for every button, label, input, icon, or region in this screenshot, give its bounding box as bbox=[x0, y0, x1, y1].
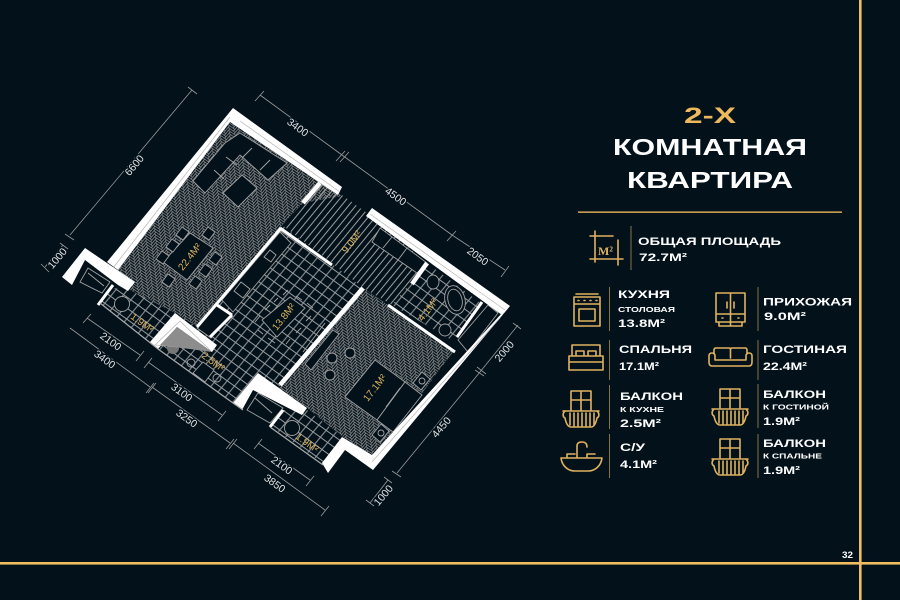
dim 4500 bbox=[340, 152, 456, 241]
item: bathroom: С/У bbox=[620, 442, 645, 454]
toilet bbox=[427, 275, 439, 289]
dim 3850 bbox=[229, 439, 329, 516]
item: bedroom balcony: БАЛКОН bbox=[763, 438, 826, 450]
room labels: 17.1М² bbox=[361, 372, 390, 404]
item: kitchen balcony: БАЛКОН bbox=[620, 391, 683, 403]
balcony table bbox=[193, 362, 214, 382]
item: kitchen: КУХНЯ bbox=[618, 289, 670, 301]
wall shading bbox=[113, 117, 505, 462]
room labels: 13.8М² bbox=[270, 301, 299, 333]
icon: sink bbox=[561, 442, 602, 471]
dim 2100 a: 2100 bbox=[97, 330, 124, 354]
outer wall: top and left bbox=[107, 108, 342, 270]
dim 1000 top: 1000 bbox=[46, 246, 70, 271]
title bbox=[613, 103, 807, 193]
item: bathroom bbox=[561, 434, 657, 478]
interior walls bbox=[98, 228, 482, 427]
icon: balcony bbox=[712, 439, 748, 475]
room labels: 2.5М² bbox=[199, 350, 227, 375]
icon: stove bbox=[574, 294, 600, 326]
wall block right bbox=[233, 373, 307, 415]
room labels bbox=[128, 228, 441, 456]
item: kitchen balcony bbox=[563, 385, 683, 430]
title: КВАРТИРА bbox=[627, 167, 793, 193]
wardrobe strip bbox=[303, 323, 339, 370]
hall wardrobe bbox=[372, 228, 427, 273]
icon: area bbox=[590, 231, 623, 265]
item: kitchen: СТОЛОВАЯ bbox=[618, 305, 675, 314]
dim 4500: 4500 bbox=[382, 185, 409, 209]
total area: ОБЩАЯ ПЛОЩАДЬ bbox=[638, 236, 781, 248]
title: 2-Х bbox=[684, 103, 736, 128]
wall block left bbox=[62, 248, 135, 291]
floor: living room bbox=[116, 120, 342, 327]
bathtub bbox=[442, 283, 468, 317]
shaft bbox=[458, 305, 498, 352]
icon: sofa bbox=[709, 348, 752, 366]
total area: 72.7М² bbox=[639, 252, 687, 264]
dim 2000 bbox=[475, 323, 521, 376]
floor: bedroom bbox=[278, 287, 453, 458]
title: КОМНАТНАЯ bbox=[613, 134, 807, 160]
dim 3400 low bbox=[70, 328, 154, 393]
item: living balcony: К ГОСТИНОЙ bbox=[763, 402, 829, 412]
dim 4450 bbox=[392, 367, 486, 477]
floor: bedroom balcony bbox=[272, 410, 343, 463]
dim 3100: 3100 bbox=[168, 381, 195, 405]
item: living room: 22.4М² bbox=[763, 361, 807, 373]
page number: 32 bbox=[842, 550, 853, 561]
dim 1000 bottom: 1000 bbox=[372, 483, 396, 508]
room labels: 1.9М² bbox=[293, 431, 321, 456]
item: living room bbox=[709, 340, 847, 380]
item: bedroom: СПАЛЬНЯ bbox=[619, 344, 692, 356]
dim 3250: 3250 bbox=[173, 407, 200, 431]
dim 1000 bottom bbox=[366, 477, 396, 508]
corner sofa bbox=[193, 133, 287, 193]
dim 3400 top bbox=[255, 91, 345, 161]
item: living room: ГОСТИНАЯ bbox=[763, 344, 847, 356]
item: bathroom: 4.1М² bbox=[620, 459, 657, 471]
floor: bathroom bbox=[392, 263, 482, 342]
wall block middle bbox=[150, 313, 217, 352]
item: hall: ПРИХОЖАЯ bbox=[763, 296, 852, 308]
floor: living balcony bbox=[100, 288, 175, 342]
icon: balcony bbox=[712, 389, 748, 425]
item: bedroom: 17.1М² bbox=[619, 361, 659, 373]
dim 3850: 3850 bbox=[261, 472, 288, 496]
dim 2100 b: 2100 bbox=[268, 454, 295, 478]
nightstands bbox=[372, 372, 430, 442]
bed bbox=[345, 360, 422, 432]
plant bbox=[167, 342, 179, 354]
item: kitchen balcony: 2.5М² bbox=[620, 418, 661, 430]
dim 2100 a bbox=[83, 314, 144, 361]
sink bbox=[439, 324, 451, 336]
bedroom furniture bbox=[303, 323, 430, 442]
dim 2100 b bbox=[254, 439, 314, 486]
room labels: 1.9М² bbox=[128, 311, 156, 336]
kitchen dining table bbox=[255, 290, 313, 344]
outer wall: right bbox=[322, 306, 510, 473]
item: kitchen: 13.8М² bbox=[618, 318, 665, 330]
item: hall: 9.0М² bbox=[764, 311, 806, 323]
floor: hall bbox=[282, 183, 427, 305]
item: living balcony: 1.9М² bbox=[763, 416, 800, 428]
title rule bbox=[578, 211, 842, 213]
living room furniture bbox=[156, 133, 287, 289]
chairs bbox=[325, 348, 355, 380]
room labels: 22.4М² bbox=[176, 241, 205, 273]
bathroom fixtures bbox=[427, 275, 498, 352]
kitchen furniture bbox=[222, 232, 313, 344]
item: living balcony: БАЛКОН bbox=[763, 389, 826, 401]
icon: balcony bbox=[563, 391, 599, 427]
door boxes bbox=[80, 268, 283, 423]
dim 3400 low: 3400 bbox=[91, 348, 118, 372]
item: bedroom bbox=[569, 340, 692, 380]
balcony furniture bbox=[114, 296, 300, 436]
dimension lines bbox=[41, 87, 521, 516]
dim 2050 bbox=[452, 235, 509, 277]
item: bedroom balcony: 1.9М² bbox=[763, 465, 800, 477]
dim 3250 bbox=[148, 383, 234, 449]
item: hall bbox=[716, 287, 852, 331]
item: living balcony bbox=[712, 384, 829, 428]
item: kitchen balcony: К КУХНЕ bbox=[620, 405, 664, 414]
floor plan bbox=[41, 87, 521, 516]
item: bedroom balcony bbox=[712, 434, 826, 478]
dim 3100 bbox=[144, 358, 226, 421]
dim 3400 top: 3400 bbox=[284, 116, 311, 140]
dining table bbox=[156, 227, 222, 289]
floor: kitchen bbox=[158, 225, 362, 403]
icon: wardrobe bbox=[716, 293, 745, 326]
coffee table bbox=[223, 175, 257, 207]
dim 2000: 2000 bbox=[493, 339, 517, 364]
balcony edge lines bbox=[100, 303, 323, 465]
item: kitchen bbox=[574, 287, 675, 331]
dim 6600: 6600 bbox=[123, 153, 147, 178]
outer wall: right top bbox=[366, 208, 510, 315]
dim 2050: 2050 bbox=[464, 245, 491, 269]
room labels: 9.0М² bbox=[340, 228, 365, 256]
icon: area: М² bbox=[598, 244, 613, 258]
item: bedroom balcony: К СПАЛЬНЕ bbox=[763, 452, 822, 460]
room labels: 4.1М² bbox=[416, 296, 441, 324]
dim 6600 bbox=[65, 87, 197, 240]
total area bbox=[590, 226, 781, 270]
icon: bed bbox=[569, 345, 603, 370]
dim 4450: 4450 bbox=[430, 415, 454, 440]
kitchen counter bbox=[222, 232, 291, 312]
walls bbox=[62, 108, 510, 473]
